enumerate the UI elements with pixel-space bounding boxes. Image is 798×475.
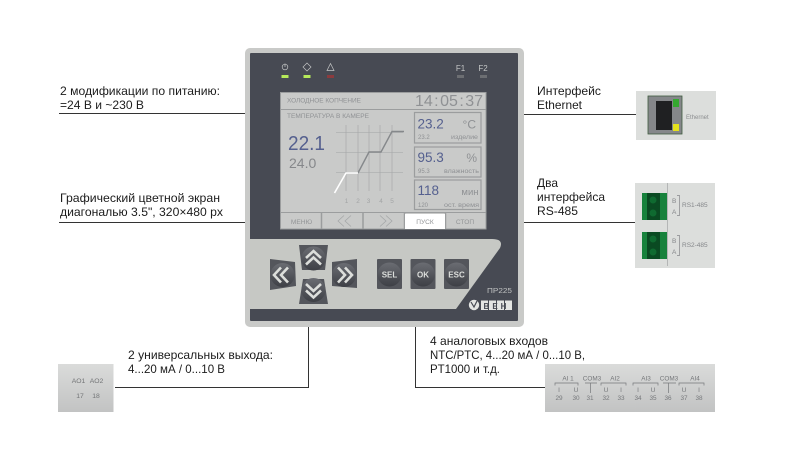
caption: analog inputs: PT1000 и т.д. bbox=[430, 362, 500, 376]
device panel bbox=[245, 48, 524, 327]
temperature readout bbox=[287, 113, 370, 171]
panel: Ethernet port bbox=[636, 91, 716, 140]
status indicators bbox=[282, 63, 488, 78]
panel: analog output terminals bbox=[58, 364, 114, 412]
panel: analog output terminals: AO2 bbox=[90, 378, 104, 385]
panel: analog input terminals: AI2 bbox=[610, 376, 620, 382]
panel: RS-485 ports: RS2-485 bbox=[682, 242, 708, 249]
panel: RS-485 ports: A bbox=[672, 209, 677, 216]
panel: RS-485 ports bbox=[635, 183, 715, 268]
caption: analog inputs: 4 аналоговых входов bbox=[430, 334, 548, 348]
value box: product temperature: °C bbox=[463, 118, 476, 132]
caption: RS-485: интерфейса bbox=[537, 190, 605, 204]
line chart: 1 bbox=[345, 198, 349, 205]
panel: analog input terminals: 35 bbox=[649, 395, 657, 402]
caption: RS-485 bbox=[537, 176, 605, 218]
line chart: 4 bbox=[379, 198, 383, 205]
screen softkeys bbox=[291, 213, 474, 229]
status indicators: F1 bbox=[456, 64, 466, 73]
panel: analog input terminals: 29 bbox=[555, 395, 563, 402]
panel: RS-485 ports: A bbox=[672, 249, 677, 256]
screen header: 14 : 05 : 37 bbox=[415, 93, 483, 110]
screen bbox=[280, 92, 486, 230]
panel: Ethernet port: Ethernet bbox=[686, 115, 709, 121]
caption: universal outputs: 2 универсальных выхода: bbox=[128, 348, 273, 362]
panel: RS-485 ports: RS1-485 bbox=[682, 202, 708, 209]
value box: humidity: % bbox=[466, 151, 477, 165]
temperature readout: ТЕМПЕРАТУРА В КАМЕРЕ bbox=[287, 113, 370, 120]
screen softkeys: ПУСК bbox=[416, 219, 434, 226]
line chart: 3 bbox=[367, 198, 371, 205]
panel: analog output terminals: 17 bbox=[76, 393, 84, 400]
keypad panel bbox=[250, 239, 501, 309]
function buttons bbox=[377, 259, 469, 289]
panel: analog input terminals bbox=[545, 364, 715, 412]
leader lines bbox=[59, 114, 636, 388]
caption: RS-485: RS-485 bbox=[537, 204, 578, 218]
screen header: ХОЛОДНОЕ КОПЧЕНИЕ bbox=[287, 98, 361, 104]
panel: RS-485 ports: B bbox=[672, 238, 676, 245]
panel: RS-485 ports: B bbox=[672, 198, 676, 205]
panel: analog input terminals: I bbox=[620, 387, 622, 394]
temperature readout: 22.1 bbox=[288, 133, 325, 155]
arrow buttons bbox=[270, 245, 357, 304]
temperature readout: 24.0 bbox=[289, 155, 316, 171]
function buttons: SEL bbox=[382, 270, 397, 280]
value box: remaining time: мин bbox=[461, 187, 478, 198]
brand logo: ВЕН bbox=[484, 302, 509, 311]
panel: analog input terminals: I bbox=[558, 387, 560, 394]
screen softkeys: СТОП bbox=[456, 219, 474, 226]
panel: analog input terminals: U bbox=[651, 387, 656, 394]
caption: universal outputs: 4...20 мА / 0...10 В bbox=[128, 362, 225, 376]
brand logo bbox=[469, 300, 512, 311]
screen softkeys: МЕНЮ bbox=[291, 219, 312, 226]
value box: product temperature: 23.2 bbox=[418, 135, 430, 141]
panel: analog input terminals: AI4 bbox=[690, 376, 700, 382]
caption: power options bbox=[60, 84, 220, 112]
value box: remaining time: 120 bbox=[418, 203, 429, 209]
panel: analog output terminals: 18 bbox=[92, 393, 100, 400]
panel: analog input terminals: U bbox=[574, 387, 579, 394]
caption: analog inputs: NTC/PTC, 4...20 мА / 0...10 В, bbox=[430, 348, 585, 362]
panel: analog input terminals: 33 bbox=[617, 395, 625, 402]
panel: analog input terminals: I bbox=[637, 387, 639, 394]
function buttons: ESC bbox=[448, 270, 465, 280]
panel: analog input terminals: 36 bbox=[664, 395, 672, 402]
panel: analog output terminals: AO1 bbox=[72, 378, 86, 385]
caption: RS-485: Два bbox=[537, 176, 558, 190]
panel: analog input terminals: U bbox=[604, 387, 609, 394]
panel: analog input terminals: 32 bbox=[602, 395, 610, 402]
value box: humidity: влажность bbox=[444, 169, 479, 175]
panel: analog input terminals: 37 bbox=[680, 395, 688, 402]
caption: power options: 2 модификации по питанию: bbox=[60, 84, 220, 98]
caption: universal outputs bbox=[128, 348, 273, 376]
caption: Ethernet: Ethernet bbox=[537, 98, 583, 112]
function buttons: OK bbox=[417, 270, 429, 280]
caption: screen: Графический цветной экран bbox=[60, 191, 220, 205]
connector RS1 bbox=[642, 193, 667, 220]
caption: Ethernet: Интерфейс bbox=[537, 84, 601, 98]
caption: Ethernet bbox=[537, 84, 601, 112]
panel: analog input terminals: AI3 bbox=[641, 376, 651, 382]
line chart: 2 bbox=[356, 198, 360, 205]
device body bbox=[245, 48, 524, 327]
line chart bbox=[334, 125, 404, 205]
panel: analog input terminals: I bbox=[698, 387, 700, 394]
screen header bbox=[287, 93, 483, 110]
value box: humidity: 95.3 bbox=[418, 169, 430, 175]
panel: analog input terminals: 30 bbox=[572, 395, 580, 402]
value box: product temperature bbox=[414, 112, 481, 143]
caption: screen bbox=[60, 191, 223, 219]
value box: humidity bbox=[414, 147, 481, 177]
panel: analog input terminals: AI 1 bbox=[562, 376, 574, 382]
connector RS2 bbox=[642, 232, 667, 259]
panel: analog input terminals: 31 bbox=[586, 395, 594, 402]
line chart: 5 bbox=[390, 198, 394, 205]
model label: ПР225 bbox=[487, 286, 512, 295]
caption: power options: =24 В и ~230 В bbox=[60, 98, 144, 112]
value box: humidity: 95.3 bbox=[418, 150, 444, 165]
caption: screen: диагональю 3.5", 320×480 px bbox=[60, 205, 223, 219]
value box: remaining time: 118 bbox=[418, 183, 439, 198]
status indicators: F2 bbox=[478, 64, 488, 73]
value box: remaining time bbox=[414, 180, 481, 210]
panel: analog input terminals: U bbox=[682, 387, 687, 394]
panel: analog input terminals: COM3 bbox=[583, 376, 602, 382]
panel: analog input terminals: 38 bbox=[695, 395, 703, 402]
value box: remaining time: ост. время bbox=[444, 203, 479, 209]
value box: product temperature: изделие bbox=[451, 135, 479, 141]
panel: analog input terminals: 34 bbox=[634, 395, 642, 402]
caption: analog inputs bbox=[430, 334, 585, 376]
value box: product temperature: 23.2 bbox=[418, 116, 444, 132]
panel: analog input terminals: COM3 bbox=[660, 376, 679, 382]
